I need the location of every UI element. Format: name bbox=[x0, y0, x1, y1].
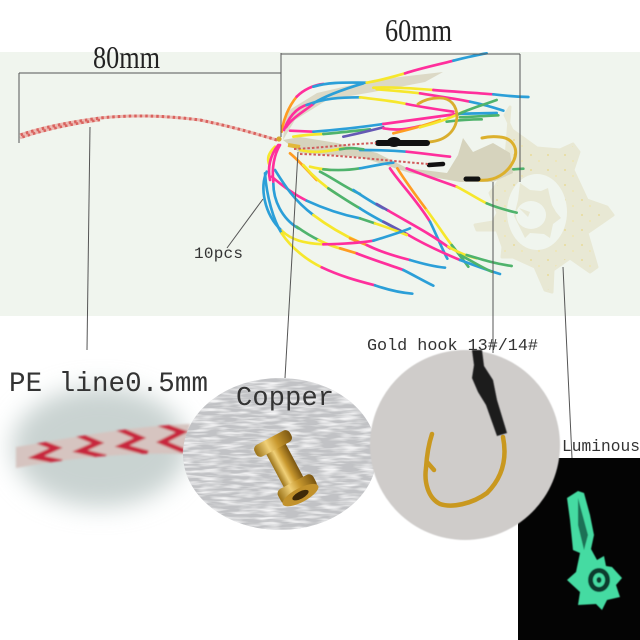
label: Gold hook: Gold hook 13#/14# bbox=[367, 337, 538, 356]
PE line detail photo bbox=[12, 387, 190, 507]
label: PE line: PE line0.5mm bbox=[9, 369, 208, 400]
rope close-up bbox=[16, 423, 190, 468]
photo panel background bbox=[0, 52, 640, 316]
label: 80mm: 80mm bbox=[93, 39, 160, 75]
luminous glow-in-the-dark photo bbox=[518, 458, 640, 640]
upper gold hook with black sleeve bbox=[378, 98, 457, 147]
label: 10pcs: 10pcs bbox=[194, 245, 243, 263]
copper connector detail photo bbox=[183, 378, 377, 530]
rainbow silicone skirt strands bbox=[263, 53, 528, 294]
label: Luminous: Luminous bbox=[562, 438, 640, 456]
label: Copper: Copper bbox=[236, 384, 334, 414]
glowing skirt bbox=[567, 491, 622, 610]
braided PE line bbox=[20, 116, 277, 140]
close-up black sleeve bbox=[472, 350, 507, 436]
luminous octopus skirt bbox=[475, 107, 613, 292]
brass connector on the rig bbox=[276, 136, 300, 147]
lower gold hook with black sleeve bbox=[429, 137, 516, 180]
twisted assist cords bbox=[294, 143, 428, 164]
translucent tail bbox=[283, 72, 513, 182]
dimension and leader lines bbox=[19, 53, 572, 458]
brass connector close-up bbox=[252, 428, 321, 511]
close-up gold hook bbox=[426, 434, 505, 506]
gold hook detail photo bbox=[370, 350, 560, 540]
label: 60mm: 60mm bbox=[385, 12, 452, 48]
